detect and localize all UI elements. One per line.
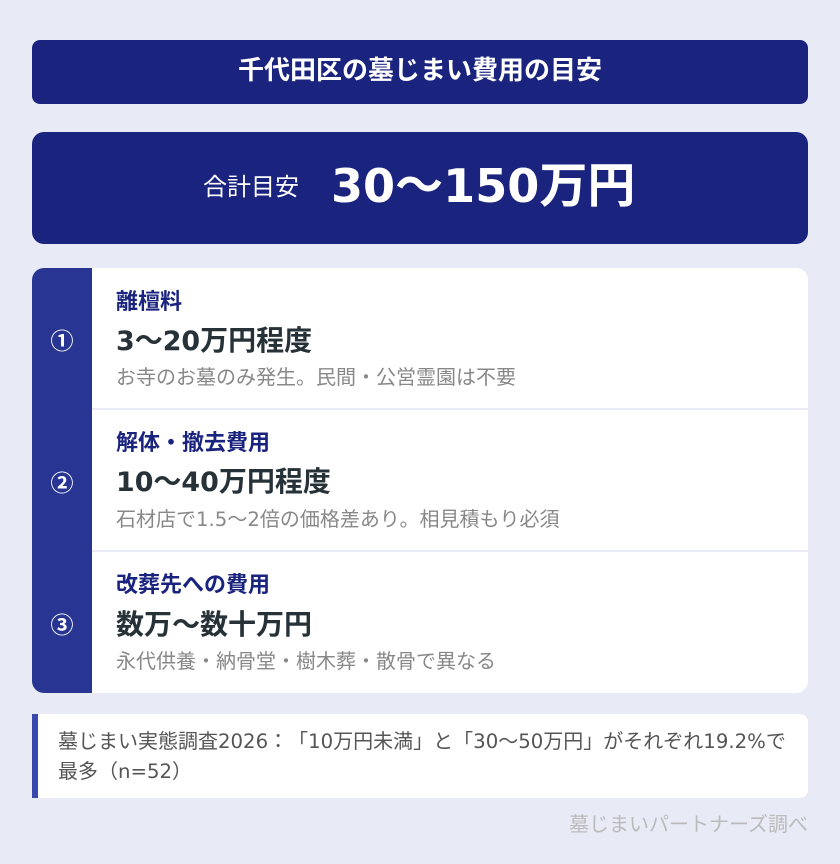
source credit: 墓じまいパートナーズ調べ — [569, 808, 808, 837]
total label: 合計目安 — [203, 167, 299, 202]
panel: cost items — [32, 268, 808, 693]
number 2: ② — [50, 464, 74, 498]
total amount: 30〜150万円 — [331, 146, 635, 216]
callout: survey note: 最多（n=52） — [58, 755, 192, 784]
item 2 name: 解体・撤去費用 — [116, 425, 270, 457]
item 3 amount: 数万〜数十万円 — [116, 603, 312, 643]
item 2 — [50, 425, 808, 552]
item 1 amount: 3〜20万円程度 — [116, 319, 312, 359]
item 2 amount: 10〜40万円程度 — [116, 460, 331, 500]
title: 千代田区の墓じまい費用の目安 — [238, 50, 602, 87]
item 1 name: 離檀料 — [116, 284, 182, 316]
item 2 note: 石材店で1.5〜2倍の価格差あり。相見積もり必須 — [116, 503, 559, 532]
callout: survey note — [32, 714, 808, 798]
item 3 note: 永代供養・納骨堂・樹木葬・散骨で異なる — [116, 645, 496, 674]
item 3 — [50, 567, 496, 674]
panel: total estimate — [32, 132, 808, 244]
number 3: ③ — [50, 606, 74, 640]
title — [32, 40, 808, 104]
number column — [32, 268, 92, 693]
callout: survey note: 墓じまい実態調査2026：「10万円未満」と「30〜50万円」がそれぞれ19.2%で — [58, 725, 786, 754]
item 1 — [50, 284, 808, 410]
item 3 name: 改葬先への費用 — [116, 567, 270, 599]
number 1: ① — [50, 322, 74, 356]
item 1 note: お寺のお墓のみ発生。民間・公営霊園は不要 — [116, 361, 516, 390]
